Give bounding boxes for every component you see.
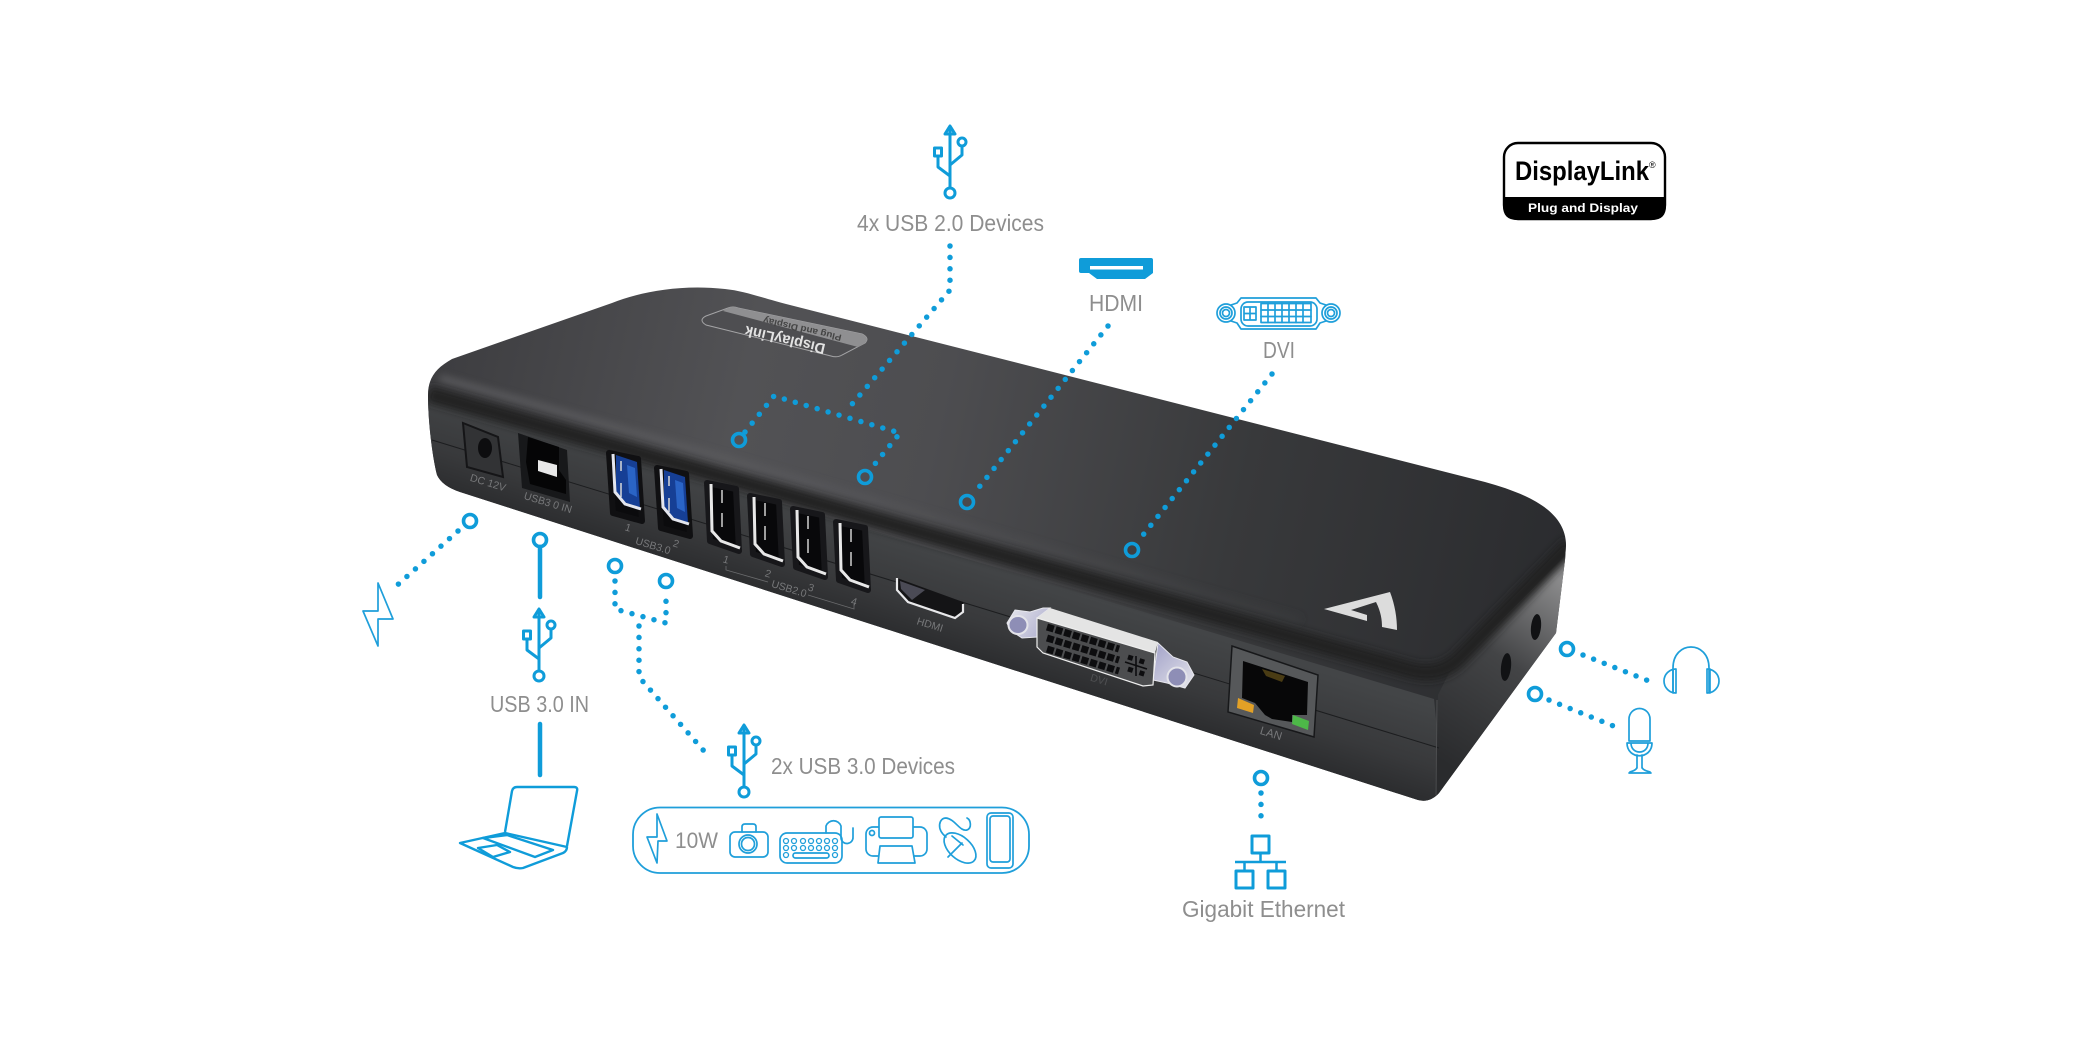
icon: usb 3.0 in symbol [524,609,555,681]
displaylink plate on top [702,307,867,357]
connector: 4x usb 2.0 dotted line [732,246,950,484]
connector: headphones dotted line [1560,642,1649,681]
icon: hdmi [1079,258,1153,279]
label: hdmi: HDMI [1089,290,1143,316]
icon: power bolt [363,583,393,646]
displaylink plate on top: Plug and Display [762,315,842,343]
usb 3.0 ports: 2 [671,538,681,551]
badge: displaylink plug and display: ® [1649,160,1656,170]
usb 3.0 port 2 [657,468,690,536]
usb 3.0 port 1 [609,453,642,521]
device: docking station [420,287,1570,810]
icon: laptop [460,787,577,868]
usb 3.0 ports [609,453,690,557]
icon: microphone [1627,708,1652,773]
usb 3.0 in port [518,433,573,516]
badge: displaylink plug and display: DisplayLink [1515,156,1649,186]
usb 2.0 ports: 2 [763,568,773,581]
connector: hdmi dotted line [960,326,1108,508]
hdmi port: HDMI [915,615,944,635]
icon: keyboard [780,821,853,863]
icon: usb 3.0 devices symbol [728,725,760,797]
usb 2.0 ports: 1 [721,554,731,567]
usb 2.0 port 4 [836,522,869,590]
label: gigabit ethernet: Gigabit Ethernet [1182,896,1346,922]
usb 2.0 ports [707,483,869,609]
label: 4x usb 2.0 devices: 4x USB 2.0 Devices [857,210,1044,236]
usb 2.0 ports: 4 [849,596,859,609]
lan port: LAN [1258,725,1283,743]
icon: printer [866,817,927,863]
device front and side faces [420,378,1570,810]
dc power port [463,423,507,494]
icon: mouse [939,818,981,869]
usb 3.0 in port: USB3 0 IN [522,490,573,516]
icon: network [1235,836,1286,888]
usb 3.0 ports: USB3.0 [634,535,672,557]
connector: dvi dotted line [1126,374,1272,556]
connector: power dotted line [394,514,476,588]
icon: camera [730,824,768,857]
connector: gigabit ethernet dotted line [1254,772,1268,822]
badge: displaylink plug and display: Plug and Display [1528,201,1638,215]
device body top face [428,287,1566,801]
usb 2.0 ports: USB2.0 [770,578,808,600]
connector: usb 3.0 in line to laptop [538,724,542,775]
icon: usb 2.0 symbol [934,126,966,198]
icon: phone [987,813,1013,868]
panel: compatible usb devices [633,808,1029,873]
connector: 2x usb 3.0 dotted lines [608,560,704,751]
dvi port: DVI [1089,672,1109,688]
usb 2.0 port 3 [793,509,826,577]
icon: headphones [1664,647,1719,693]
dc power port: DC 12V [469,472,507,494]
badge: displaylink plug and display [1503,143,1666,220]
icon: 10w bolt [647,814,667,863]
displaylink plate on top: DisplayLink [743,322,827,357]
v7 logo [1324,592,1397,630]
label: usb 3.0 in: USB 3.0 IN [490,691,589,717]
dvi port [1007,608,1194,688]
connector: usb 3.0 in line to device [534,534,546,597]
label: dvi: DVI [1263,337,1295,363]
usb 3.0 ports: 1 [623,522,633,535]
hdmi port [897,578,963,635]
label: 2x usb 3.0 devices: 2x USB 3.0 Devices [771,753,955,779]
usb 2.0 ports: 3 [806,582,816,595]
label: 10w: 10W [675,828,718,853]
connector: microphone dotted line [1528,688,1616,727]
usb 2.0 port 2 [750,496,783,564]
usb 2.0 port 1 [707,483,740,551]
icon: dvi [1217,298,1340,329]
lan port [1228,646,1318,743]
side audio jacks [1500,614,1542,681]
